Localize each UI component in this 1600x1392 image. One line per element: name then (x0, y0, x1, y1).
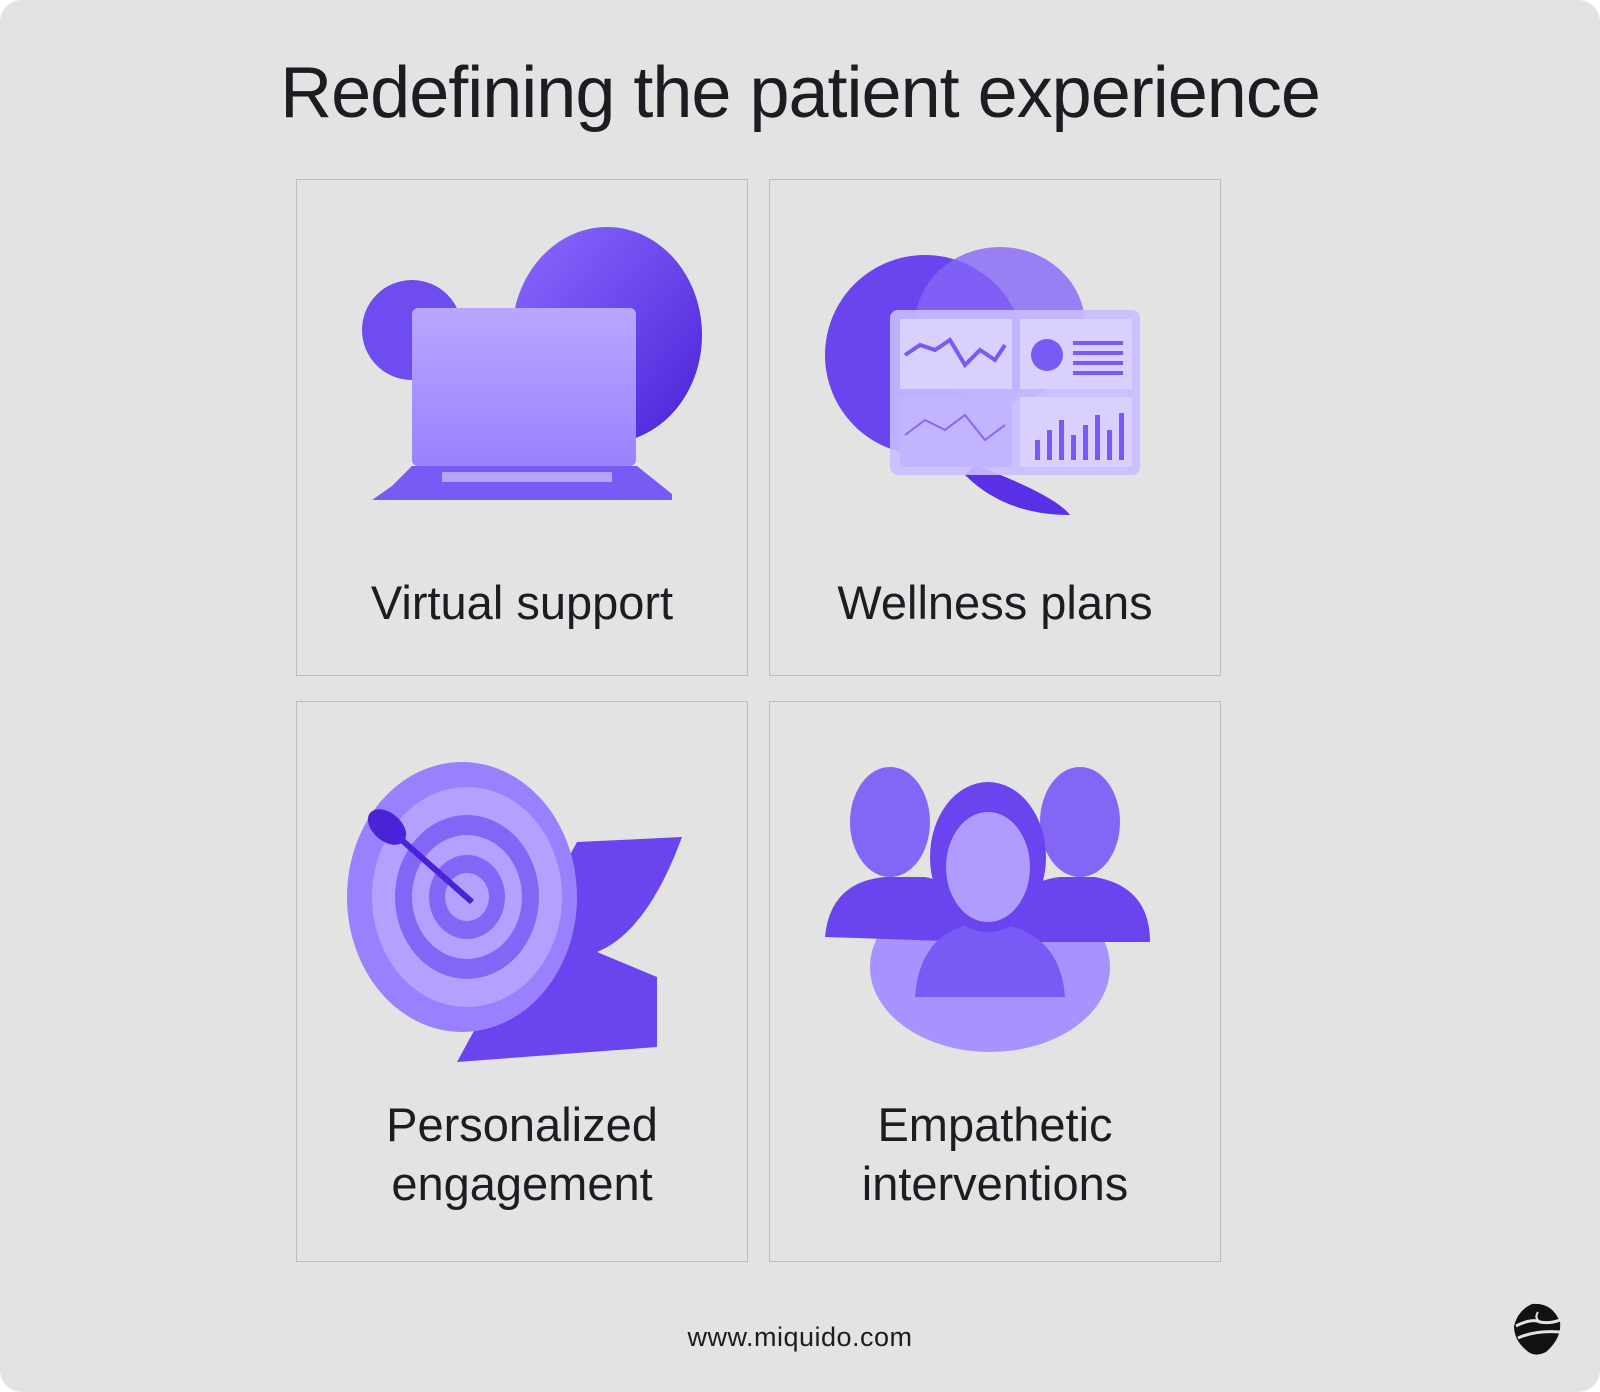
label (862, 1098, 1128, 1210)
icon: dashboard (825, 247, 1140, 515)
label: engagement (391, 1157, 653, 1210)
label: Personalized (386, 1098, 658, 1151)
icon: target (347, 762, 682, 1062)
label: Wellness plans (837, 576, 1153, 629)
label: Virtual support (371, 576, 673, 629)
icon: people (825, 767, 1150, 1052)
panel: personalized engagement (296, 701, 748, 1262)
icon: logo (1514, 1304, 1560, 1355)
label (386, 1098, 658, 1210)
panel: wellness plans (769, 179, 1221, 676)
icon: laptop (362, 227, 702, 500)
label: Empathetic (877, 1098, 1113, 1151)
footer url: www.miquido.com (687, 1322, 913, 1352)
panel: empathetic interventions (769, 701, 1221, 1262)
title: Redefining the patient experience (280, 53, 1320, 133)
panel: virtual support (296, 179, 748, 676)
label: interventions (862, 1157, 1128, 1210)
